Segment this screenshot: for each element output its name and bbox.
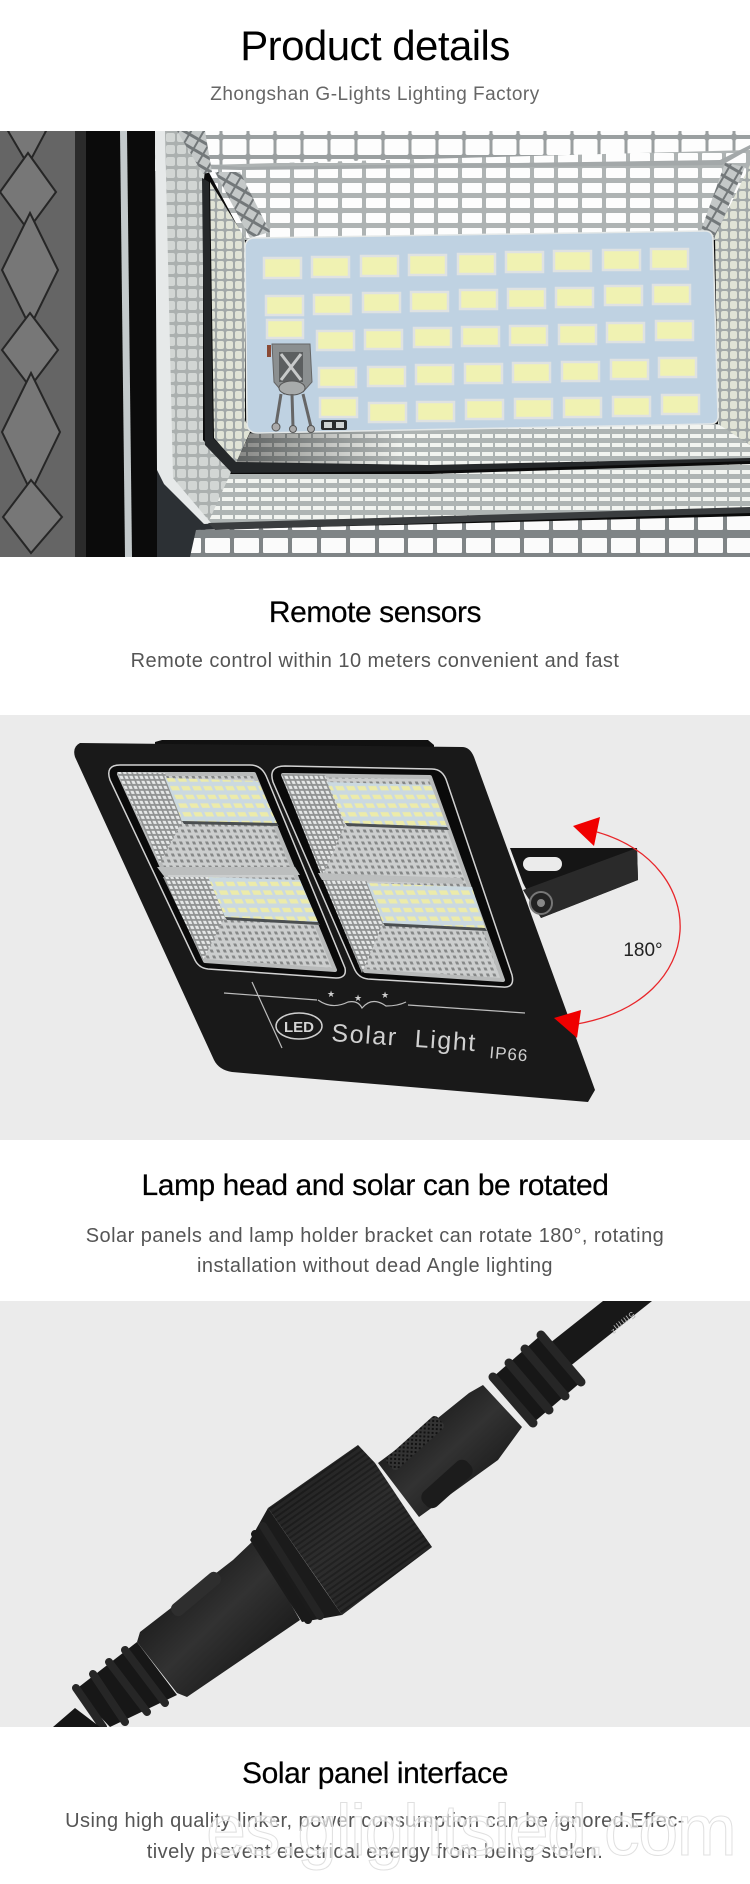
- heading: rotation: Lamp head and solar can be rotated: [141, 1169, 609, 1202]
- LED badge: [276, 1013, 322, 1039]
- LED badge: LED: [284, 1019, 314, 1036]
- lamp label: Solar Light: [331, 1019, 478, 1057]
- PCB with LEDs: [245, 231, 718, 433]
- title: Product details: [240, 22, 510, 69]
- text: interface description: tively prevent electrical energy from being stolen.: [147, 1841, 603, 1863]
- stars: ★: [354, 993, 362, 1003]
- text: remote sensors description: Remote control within 10 meters convenient and fast: [131, 650, 619, 672]
- left panel: [109, 765, 345, 978]
- subtitle: Zhongshan G-Lights Lighting Factory: [210, 84, 540, 105]
- stars: ★: [327, 989, 335, 999]
- logo lines and ornament: [224, 982, 525, 1048]
- text: rotation description: [86, 1225, 664, 1277]
- coupling nut: [268, 1445, 432, 1615]
- upper strain relief: [493, 1335, 581, 1423]
- IP66 label: IP66: [489, 1043, 529, 1065]
- heading: solar panel interface: Solar panel interface: [242, 1757, 508, 1790]
- stars: [327, 989, 389, 1003]
- gasket rings: [250, 1508, 342, 1622]
- rotation arrow: [554, 817, 680, 1038]
- text: interface description: [65, 1810, 685, 1863]
- bracket: [510, 848, 638, 918]
- text: rotation description: Solar panels and lamp holder bracket can rotate 180°, rotating: [86, 1225, 664, 1247]
- heading: remote sensors: Remote sensors: [269, 596, 481, 629]
- text: rotation description: installation without dead Angle lighting: [197, 1255, 553, 1277]
- stars: ★: [381, 990, 389, 1000]
- panel: rotating lamp head: [0, 715, 750, 1140]
- right panel: [272, 766, 513, 987]
- upper connector body: [378, 1385, 522, 1517]
- lower strain relief: [53, 1642, 177, 1727]
- upper cable: [550, 1301, 652, 1367]
- remote sensor component: [267, 344, 347, 432]
- left strip with diamonds: [0, 120, 86, 557]
- rotation label: 180°: [623, 940, 663, 961]
- text: interface description: Using high quality linker, power consumption can be ignored.Effec-: [65, 1810, 685, 1832]
- lamp body: [74, 740, 595, 1102]
- watermark: es.glightsled.com: [206, 1791, 735, 1871]
- reflector: [155, 131, 750, 557]
- cable marking: 5mm²: [607, 1309, 637, 1336]
- photo: LED close-up with remote sensor: [0, 131, 750, 557]
- lower connector body: [137, 1540, 300, 1697]
- panel: cable connector: [0, 1301, 750, 1727]
- frame stripe: [120, 131, 132, 557]
